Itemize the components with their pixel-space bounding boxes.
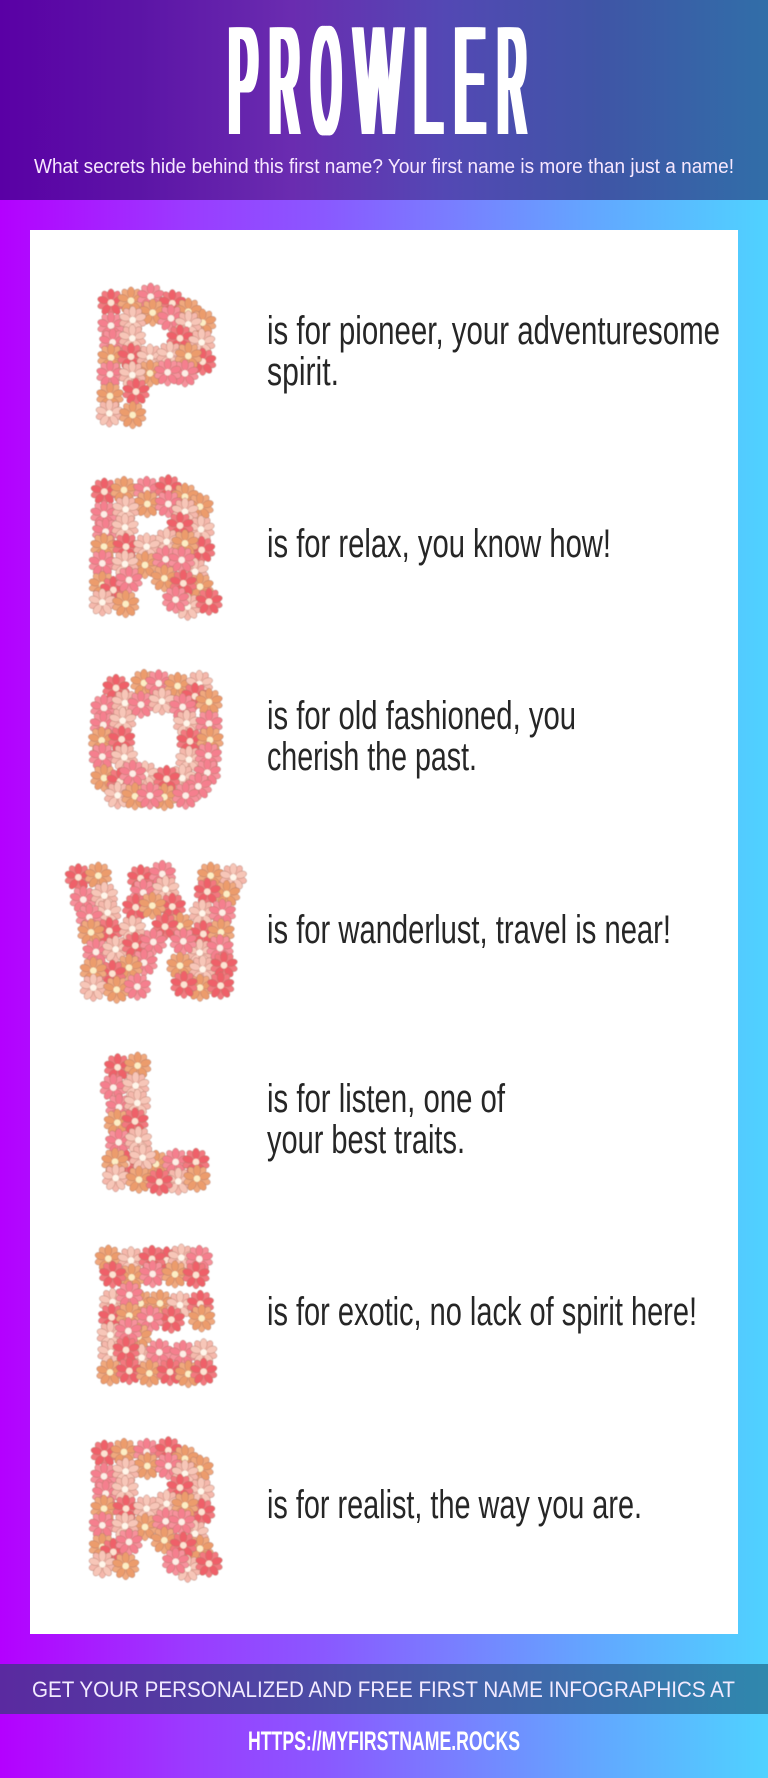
text: P: spirit. [267, 350, 339, 394]
text: R relax: is for relax, you know how! [267, 522, 611, 566]
letter W flowers [64, 860, 248, 1003]
footer call to action: GET YOUR PERSONALIZED AND FREE FIRST NAME INFOGRAPHICS AT [32, 1677, 735, 1702]
letter E flowers [94, 1244, 218, 1388]
letter O flowers [87, 669, 224, 811]
footer url: HTTPS://MYFIRSTNAME.ROCKS [248, 1726, 520, 1756]
text: P [267, 309, 720, 394]
footer band [0, 1664, 768, 1714]
text: L: is for listen, one of [267, 1077, 506, 1121]
text: L: your best traits. [267, 1118, 465, 1162]
subtitle: What secrets hide behind this first name? Your first name is more than just a name! [34, 155, 734, 178]
text: L [267, 1077, 506, 1162]
second letter R flowers [88, 1436, 223, 1582]
text: O: cherish the past. [267, 735, 477, 779]
letter L flowers [99, 1052, 211, 1196]
white content panel [30, 230, 738, 1634]
text: O [267, 694, 576, 779]
title [228, 0, 528, 167]
header band [0, 0, 768, 200]
text: O: is for old fashioned, you [267, 694, 576, 738]
letter P flowers [95, 283, 217, 429]
letter R flowers [88, 474, 223, 620]
